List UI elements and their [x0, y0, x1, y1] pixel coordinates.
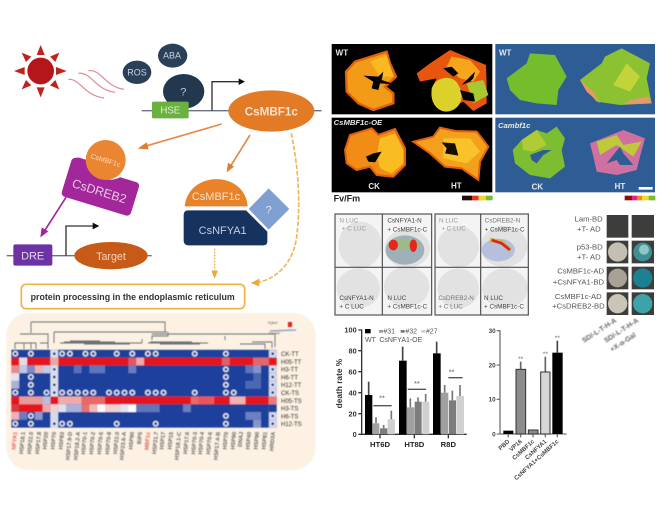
luciferase labels: + CsMBF1c-C — [387, 226, 428, 233]
luciferase labels: N LUC — [484, 295, 503, 302]
luciferase labels: + C LUC — [342, 226, 367, 233]
panel: activation bar chart — [489, 328, 567, 482]
ROS bubble: ROS — [127, 67, 147, 77]
death rate legend: #32 — [405, 328, 417, 335]
activation x labels: PBD — [498, 439, 512, 452]
arrow: dashed to ER — [251, 133, 299, 286]
death rate axis labels: 80 — [349, 346, 357, 355]
heatmap column labels: HSP70-3 — [191, 432, 199, 455]
death rate bars — [365, 353, 464, 434]
activation axis labels: 20 — [489, 362, 496, 369]
heatmap column labels: HSP70-2 — [89, 432, 97, 455]
death rate legend — [365, 328, 438, 344]
luciferase leaves — [335, 214, 528, 315]
heatmap column labels: HSP40 — [245, 432, 253, 450]
heatmap column labels: HSP81 — [261, 432, 269, 450]
heatmap column labels: HSP18.2-A — [74, 432, 82, 460]
heatmap colour overrides — [11, 350, 277, 428]
icon: heat waves — [68, 71, 124, 98]
death rate significance: ** — [379, 394, 385, 403]
death rate significance: ** — [414, 379, 420, 388]
activation x labels: CsMBF1c — [512, 439, 536, 462]
activation significance: ** — [543, 351, 548, 358]
complex: CsDREB2 with CsMBF1c: CsMBF1c — [90, 153, 121, 169]
arrow: to CsNFYA1 — [227, 135, 250, 172]
heatmap column labels: HSP70-5 — [97, 432, 105, 455]
gene line with promoter arrow — [142, 78, 322, 111]
heatmap column labels: HSP90 — [128, 432, 136, 450]
death rate group labels — [370, 440, 456, 449]
image: WT black panel — [332, 44, 492, 114]
death rate legend: #27 — [426, 328, 438, 335]
death rate legend: #31 — [383, 328, 395, 335]
ABA bubble: ABA — [163, 51, 181, 61]
heatmap column labels: HSP70-8 — [105, 432, 113, 455]
panel labels: HT — [615, 182, 625, 191]
panel labels: CK — [532, 183, 543, 192]
heatmap column labels: HSP90 — [253, 432, 261, 450]
luciferase labels: CsDREB2-N — [438, 295, 474, 302]
heatmap row labels: H6-TS — [281, 414, 298, 420]
luciferase labels: + CsMBF1c-C — [484, 304, 524, 311]
heatmap column labels: HSP17.4-B — [214, 432, 222, 460]
death rate axes — [358, 330, 467, 438]
heatmap column labels: BiP5 — [137, 432, 144, 445]
activation axes — [497, 331, 567, 437]
luciferase labels: + C LUC — [438, 304, 463, 311]
luciferase labels: + C LUC — [339, 304, 364, 311]
death rate group labels: R8D — [441, 440, 456, 449]
panel: heatmap — [11, 321, 302, 460]
complex: CsMBF1c with CsNFYA1: ? — [266, 204, 272, 216]
activation x labels: VP16 — [509, 439, 524, 453]
ROS bubble — [123, 61, 151, 84]
yeast row labels: CsMBF1c-AD — [555, 292, 602, 301]
activation axis labels: 10 — [489, 397, 496, 404]
activation axis labels: 0 — [492, 431, 496, 438]
heatmap column labels: HSP21.7 — [152, 432, 160, 454]
heatmap column labels: HSP70 — [222, 432, 230, 450]
legend — [268, 321, 296, 335]
Target oval: Target — [96, 251, 126, 263]
luciferase labels: CsNFYA1-N — [339, 295, 374, 302]
yeast row labels: p53-BD — [577, 243, 603, 252]
panel labels: Cambf1c — [498, 121, 531, 130]
heatmap row labels: H6-TT — [281, 375, 298, 381]
death rate legend: WT — [365, 337, 377, 344]
heatmap row labels: CK-TT — [281, 352, 299, 358]
yeast row labels: CsMBF1c-AD — [557, 267, 604, 276]
heatmap row labels: CK-TS — [281, 391, 299, 397]
luciferase frames — [335, 214, 528, 315]
panel labels: WT — [336, 49, 348, 58]
yeast row labels: +CsDREB2-BD — [552, 302, 605, 311]
heatmap column labels — [11, 431, 277, 460]
death rate significance — [373, 367, 463, 406]
callout: protein processing — [21, 284, 245, 309]
heatmap column labels: HSP18.1-C — [175, 432, 183, 460]
ABA bubble — [158, 44, 187, 68]
heatmap column labels: HSP90 — [230, 432, 238, 450]
activation bars — [503, 353, 563, 434]
heatmap column labels: HSP17 — [159, 432, 167, 450]
arrow: to CsDREB2 — [138, 124, 222, 149]
luciferase labels: N LUC — [387, 295, 407, 302]
CsMBF1c oval: CsMBF1c — [245, 105, 298, 118]
yeast row labels: +CsNFYA1-BD — [553, 277, 604, 286]
luciferase labels: N LUC — [339, 218, 359, 225]
panel labels: HT — [451, 181, 462, 190]
heatmap row labels — [281, 352, 302, 428]
icon: sun — [14, 45, 67, 97]
yeast row labels: +T- AD — [577, 252, 601, 261]
legend: low high — [269, 331, 280, 335]
heatmap column labels: MBF1c — [144, 432, 152, 450]
dendrogram — [15, 322, 275, 349]
death rate axis labels: 0 — [353, 430, 357, 439]
death rate axis labels: 20 — [349, 409, 357, 418]
death rate axis labels — [344, 326, 357, 439]
arrow: dotted to ER — [211, 249, 218, 279]
heatmap column labels: HSP15 — [167, 432, 175, 450]
death rate axis labels: 100 — [344, 326, 357, 335]
target gene line with promoter arrow — [7, 223, 152, 256]
panel: death rate chart — [334, 326, 467, 449]
yeast row labels: +T- AD — [577, 225, 601, 234]
image: Cambf1c blue panel — [495, 118, 655, 192]
heatmap column labels: HSP18.1 — [19, 432, 27, 454]
heatmap row labels: H05-TT — [281, 360, 302, 366]
yeast medium labels: +X-α-Gal — [609, 332, 637, 354]
callout: protein processing: protein processing in the endoplasmic reticulum — [31, 292, 235, 302]
heatmap column labels: HSP17.6 — [183, 432, 191, 454]
activation error bars — [521, 341, 557, 372]
death rate group labels: HT6D — [370, 440, 390, 449]
panel labels: CsMBF1c-OE — [334, 118, 383, 127]
yeast medium labels: SD/-L-T-H-A — [581, 317, 618, 345]
DRE box: DRE — [21, 250, 44, 262]
yeast plates — [607, 215, 654, 315]
HSE box: HSE — [160, 106, 181, 117]
arrow: to DRE — [40, 197, 66, 237]
heatmap column labels: HSP70-6 — [206, 432, 214, 455]
heatmap base cells — [11, 350, 277, 428]
luciferase labels: N LUC — [439, 218, 458, 225]
death rate axis labels: 40 — [349, 388, 357, 397]
heatmap column labels: HSP23.6-A — [120, 432, 128, 460]
heatmap column labels: HSP70-1 — [81, 432, 89, 455]
panel: luciferase complementation — [335, 214, 528, 315]
scale bar — [639, 187, 653, 190]
heatmap column labels: HSP17.8 — [35, 432, 43, 454]
activation significance: ** — [555, 335, 560, 342]
heatmap column labels: DNAJ — [238, 432, 245, 447]
luciferase labels: + C LUC — [441, 226, 466, 233]
yeast medium labels — [581, 317, 640, 354]
image: WT blue panel — [495, 44, 655, 114]
heatmap marker dots — [13, 352, 275, 426]
complex: CsMBF1c with CsNFYA1: CsMBF1c — [192, 191, 241, 203]
activation significance: ** — [518, 356, 524, 363]
activation x labels: CsNFYA1+CsMBF1c — [514, 439, 561, 482]
activation significance — [518, 335, 560, 363]
death rate axis labels: 60 — [349, 367, 357, 376]
death rate y title: death rate % — [334, 358, 344, 408]
panel: signalling model — [7, 44, 322, 309]
colour scale right — [625, 196, 655, 200]
complex: CsMBF1c with CsNFYA1 — [184, 179, 289, 245]
image: CsMBF1c-OE black panel — [332, 118, 492, 192]
complex: CsMBF1c with CsNFYA1: CsNFYA1 — [199, 225, 247, 237]
luciferase signal NFYA1 — [386, 235, 424, 265]
heatmap column labels: HSP17.9-D — [66, 432, 74, 460]
luciferase labels: CsDREB2-N — [485, 218, 521, 225]
heatmap red rows — [11, 358, 277, 412]
panel labels: WT — [499, 49, 512, 58]
panel: heatmap background — [6, 313, 316, 470]
heatmap row labels: H12-TS — [281, 422, 302, 428]
heatmap row labels: H12-TT — [281, 383, 302, 389]
Target oval — [74, 242, 148, 269]
heatmap column labels: HSP70 — [50, 432, 58, 450]
legend: Fpkm — [268, 321, 278, 325]
colour scale left — [462, 196, 493, 200]
yeast row labels: Lam-BD — [575, 215, 603, 224]
heatmap row labels: H3-TS — [281, 407, 298, 413]
luciferase labels: + CsMBF1c-C — [485, 226, 525, 233]
luciferase labels — [339, 218, 525, 311]
CsMBF1c oval — [228, 90, 314, 132]
complex: CsDREB2 with CsMBF1c: CsDREB2 — [70, 176, 128, 206]
panel: chlorophyll fluorescence — [332, 44, 655, 204]
heatmap column labels: HSP83 — [58, 432, 66, 450]
luciferase labels: + CsMBF1c-C — [387, 304, 428, 311]
death rate significance: ** — [449, 367, 455, 376]
activation axis labels — [489, 328, 496, 438]
luciferase signal DREB2 — [482, 239, 515, 261]
heatmap column labels: NFYA1 — [11, 432, 19, 450]
heatmap column labels: HSP70-4 — [198, 431, 206, 455]
Fv/Fm label: Fv/Fm — [334, 194, 360, 204]
HSE box — [152, 102, 189, 118]
activation x labels: CsNFYA1 — [524, 439, 549, 461]
yeast medium labels: SD/-L-T-H-A — [603, 317, 640, 345]
panel: yeast two-hybrid — [552, 215, 654, 315]
DRE box — [13, 244, 52, 266]
heatmap column labels: HSP20 — [42, 432, 50, 450]
panel labels: CK — [368, 182, 380, 191]
complex: CsDREB2 with CsMBF1c — [61, 140, 142, 217]
unknown factor bubble — [163, 74, 204, 109]
activation axis labels: 30 — [489, 328, 496, 335]
death rate legend: CsNFYA1-OE — [379, 337, 423, 344]
heatmap column labels: HSP22.0 — [27, 432, 35, 454]
luciferase labels: CsNFYA1-N — [387, 218, 422, 225]
heatmap column labels: HRD3A — [269, 432, 277, 451]
panel labels — [334, 49, 625, 192]
yeast row labels — [552, 215, 605, 311]
death rate error bars — [369, 342, 460, 428]
death rate group labels: HT8D — [404, 440, 425, 449]
unknown factor bubble: ? — [180, 86, 186, 98]
yeast colonies — [608, 242, 652, 313]
heatmap column labels: HSP22.0 — [113, 432, 121, 454]
heatmap row labels: H3-TT — [281, 368, 298, 374]
heatmap row labels: H05-TS — [281, 399, 302, 405]
